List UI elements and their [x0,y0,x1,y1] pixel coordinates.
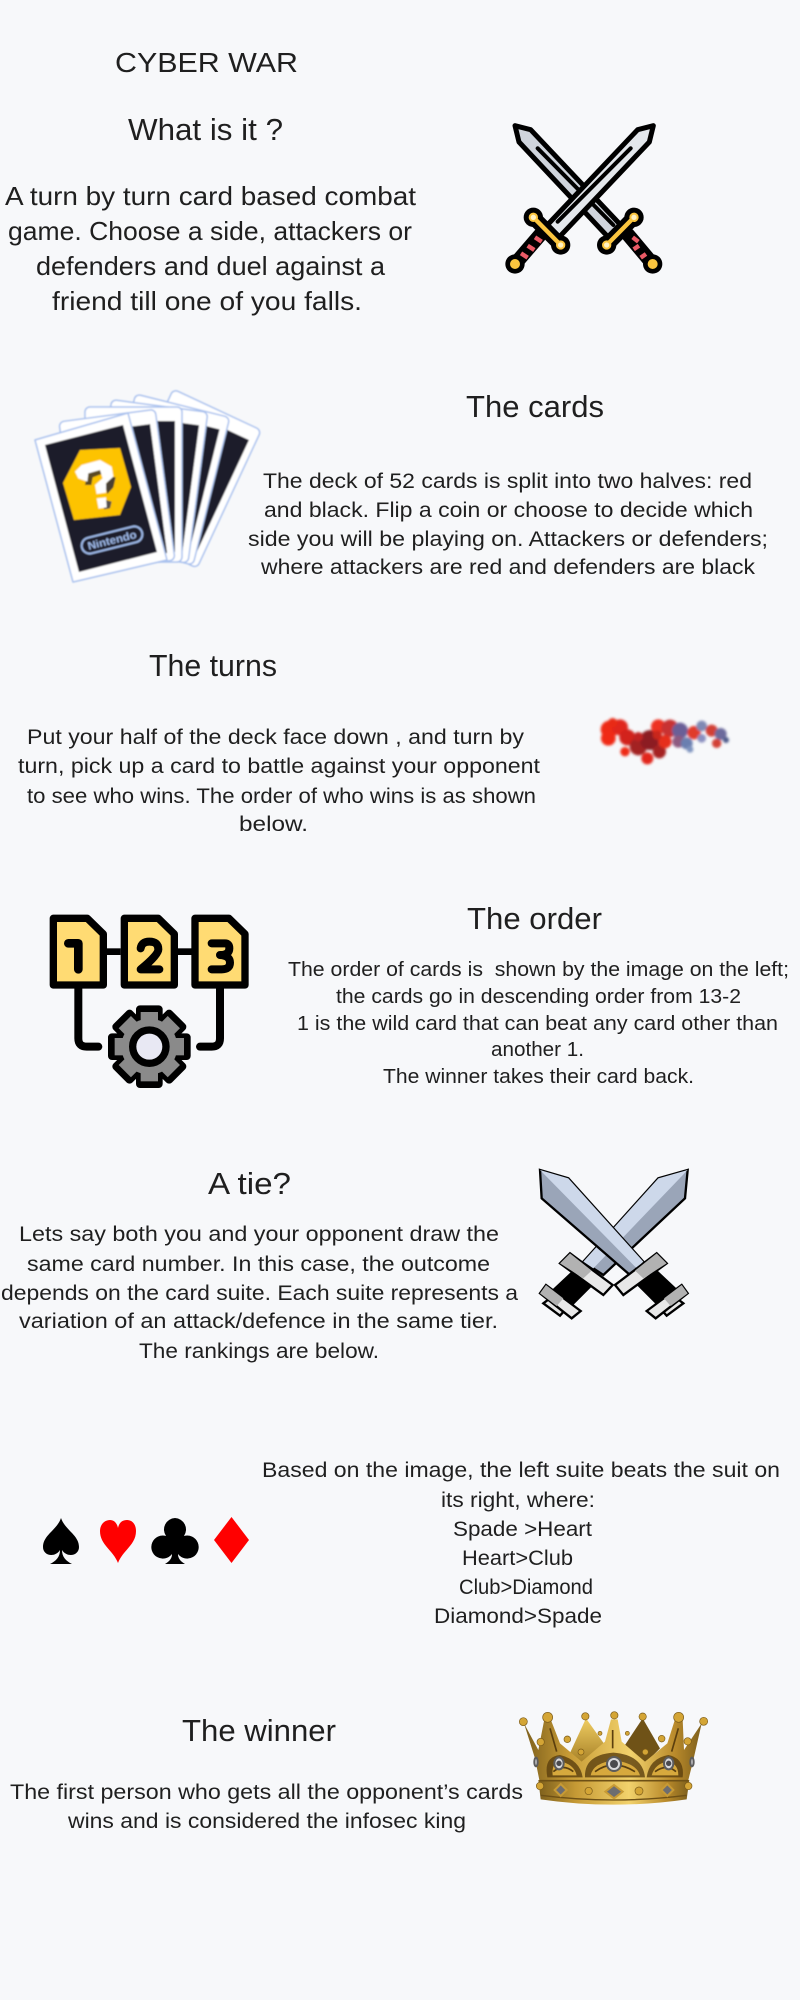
text block: deck explanation [248,470,768,579]
text block: suit ranking explanation [262,1459,780,1628]
text block: description of game: defenders and duel against a [36,251,386,281]
text block: how turns work: to see who wins. The order of who wins is as shown [27,785,536,808]
icon: fan of cards [35,389,261,582]
text block: description of game: game. Choose a side, attackers or [8,216,412,246]
icon: crossed swords with yellow guards [505,126,662,274]
text block: suit ranking explanation: Heart>Club [462,1547,573,1570]
panel: the winner [10,1712,708,1833]
text block: card order: the cards go in descending order from 13-2 [336,986,741,1008]
text block: suit ranking explanation: Spade >Heart [453,1518,592,1541]
panel: the order [53,901,789,1088]
text block: tie explanation: Lets say both you and your opponent draw the [19,1223,499,1246]
text block: description of game: friend till one of you falls. [52,286,362,316]
icon: numbered documents and gear [53,918,245,1088]
text block: how turns work: turn, pick up a card to battle against your opponent [18,755,540,778]
icon: crossed steel swords [540,1170,688,1318]
text block: tie explanation: variation of an attack/defence in the same tier. [19,1310,498,1333]
icon: fan of cards: Nintendo [87,529,138,553]
text block: card order: another 1. [491,1039,584,1061]
heading: the order: The order [467,901,602,936]
icon: red and blue smoke explosion [601,718,729,764]
text block: suit ranking explanation: Club>Diamond [459,1576,593,1599]
heading: the turns: The turns [149,648,277,683]
heading: what is it: What is it ? [128,112,283,147]
icon: club [151,1518,199,1564]
text block: deck explanation: and black. Flip a coin or choose to decide which [264,499,753,522]
text block: description of game: A turn by turn card based combat [5,181,417,211]
panel: suit ranking [43,1459,780,1628]
text block: how turns work: Put your half of the deck face down , and turn by [27,726,525,749]
panel: what is it [5,112,662,316]
icon: spade [43,1518,79,1564]
text block: card order [288,959,789,1088]
text block: card order: The winner takes their card back. [383,1066,694,1088]
text block: tie explanation: depends on the card suite. Each suite represents a [1,1282,518,1305]
text block: how turns work [18,726,540,836]
text block: deck explanation: The deck of 52 cards is split into two halves: red [263,470,752,493]
icon: diamond [214,1517,249,1563]
panel: the turns [18,648,729,836]
icon: heart [100,1520,136,1563]
text block: description of game [5,181,417,316]
text block: tie explanation: same card number. In this case, the outcome [27,1253,490,1276]
text block: winner explanation [10,1781,523,1833]
heading: the winner: The winner [182,1713,336,1748]
text block: suit ranking explanation: Diamond>Spade [434,1605,602,1628]
heading: a tie: A tie? [208,1166,291,1201]
text block: deck explanation: where attackers are red and defenders are black [260,556,756,579]
text block: deck explanation: side you will be playing on. Attackers or defenders; [248,528,768,551]
panel: the cards [35,389,768,582]
text block: card order: The order of cards is shown by the image on the left; [288,959,789,981]
title: CYBER WAR [115,47,298,78]
text block: winner explanation: wins and is considered the infosec king [67,1810,466,1833]
heading: the cards: The cards [466,389,604,424]
text block: tie explanation: The rankings are below. [139,1340,379,1363]
text block: card order: 1 is the wild card that can beat any card other than [297,1013,778,1035]
text block: suit ranking explanation: its right, where: [441,1489,595,1512]
panel: a tie [1,1166,688,1363]
text block: tie explanation [1,1223,518,1363]
text block: winner explanation: The first person who gets all the opponent’s cards [10,1781,523,1804]
text block: suit ranking explanation: Based on the image, the left suite beats the suit on [262,1459,780,1482]
icon: golden crown [519,1712,708,1805]
text block: how turns work: below. [239,813,308,836]
